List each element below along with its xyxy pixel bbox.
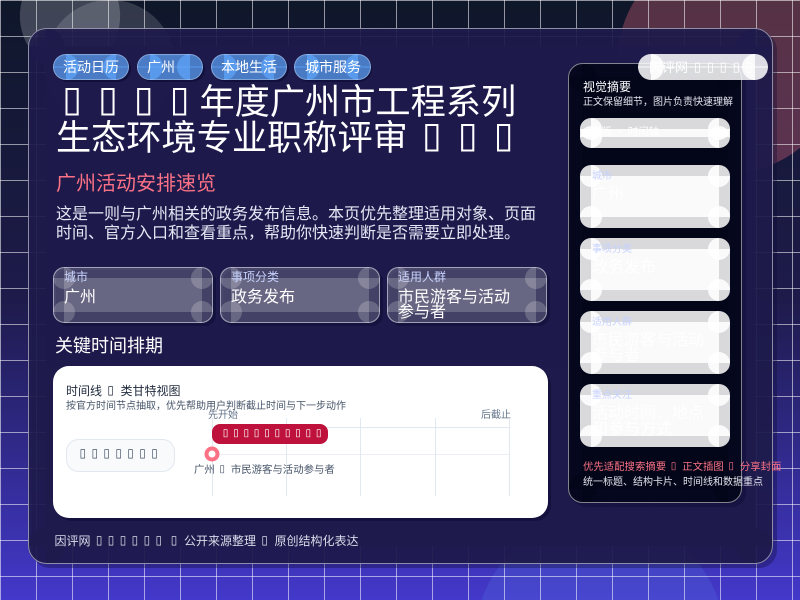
stat card: 城市: 广州	[64, 283, 96, 307]
subtitle: 广州活动安排速览	[56, 167, 216, 196]
timeline heading: 时间线	[66, 382, 102, 399]
section heading: 关键时间排期	[55, 332, 163, 358]
pill: 城市服务	[294, 54, 372, 82]
milestone dot	[206, 448, 218, 460]
footer: ▯	[261, 533, 273, 547]
card: 适用人群	[580, 311, 730, 374]
card: format: 横版 · 时间轴	[591, 123, 659, 138]
gantt bar	[212, 424, 328, 444]
footer: ▯	[171, 533, 183, 547]
stat card: 适用人群	[387, 267, 550, 326]
pill: 活动日历: 活动日历	[63, 57, 119, 77]
summary heading: 视觉摘要	[583, 78, 631, 95]
card: 重点关注: 和参与方式	[592, 415, 672, 439]
title: ▯▯▯	[422, 115, 529, 156]
card: 重点关注	[580, 384, 730, 447]
card: 事项分类	[580, 238, 730, 301]
adaptation note: ▯	[728, 460, 739, 472]
card: 城市	[580, 165, 730, 228]
brand pill: 因评网	[649, 57, 688, 76]
stat card: 城市	[53, 267, 216, 326]
stat card: 事项分类: 事项分类	[231, 268, 279, 285]
adaptation note: ▯	[671, 460, 681, 472]
adaptation note: 正文插图	[679, 458, 727, 473]
timeline heading: ▯	[107, 383, 119, 397]
pill: 活动日历	[53, 54, 131, 82]
footer: 原创结构化表达	[271, 532, 359, 549]
panel: visual summary	[568, 63, 781, 507]
title: 生态环境专业职称评审	[56, 110, 408, 161]
adaptation note: 分享封面	[737, 458, 781, 473]
stat card: 事项分类: 政务发布	[231, 283, 295, 307]
title	[56, 74, 529, 161]
stat card: 适用人群: 参与者	[398, 298, 446, 322]
intro text	[56, 200, 536, 243]
stat card: 适用人群: 适用人群	[398, 268, 446, 285]
tag pills	[53, 54, 372, 82]
footer: 公开来源整理	[181, 532, 259, 549]
pill: 城市服务: 城市服务	[305, 57, 361, 77]
axis label: start: 先开始	[208, 406, 238, 421]
title: 年度广州市工程系列	[199, 74, 516, 125]
card: 城市: 广州	[592, 180, 624, 204]
footer: ▯▯▯▯▯▯	[96, 533, 168, 547]
pill: 本地生活	[211, 54, 289, 82]
chip: row label	[66, 440, 174, 472]
timeline description: 按官方时间节点抽取，优先帮助用户判断截止时间与下一步动作	[66, 397, 346, 412]
milestone label: ▯	[219, 463, 230, 475]
footer: 因评网	[54, 532, 91, 549]
brand pill: ▯▯▯▯▯	[694, 60, 758, 75]
summary note: 统一标题、结构卡片、时间线和数据重点	[583, 473, 763, 488]
intro text: 时间、官方入口和查看重点，帮助你快速判断是否需要立即处理。	[56, 219, 520, 243]
stat card: 适用人群: 市民游客与活动	[398, 283, 510, 307]
chip: row label: ▯▯▯▯▯▯▯	[80, 446, 163, 460]
title: ▯▯▯▯	[62, 79, 205, 120]
stat card: 事项分类	[220, 267, 383, 326]
milestone label: 市民游客与活动参与者	[228, 461, 335, 476]
summary description: 正文保留细节，图片负责快速理解	[583, 93, 733, 108]
intro text: 这是一则与广州相关的政务发布信息。本页优先整理适用对象、页面	[56, 200, 536, 224]
card: 事项分类: 事项分类	[592, 240, 632, 255]
pill: 本地生活: 本地生活	[221, 57, 277, 77]
gantt bar: ▯▯▯▯▯▯▯▯▯▯	[223, 427, 326, 439]
stat card: 城市: 城市	[64, 268, 88, 285]
pill: 广州: 广州	[147, 57, 175, 77]
card: 适用人群: 市民游客与活动	[592, 326, 704, 350]
milestone label: 广州	[194, 461, 215, 476]
brand pill	[638, 54, 768, 80]
pill: 广州	[137, 54, 205, 82]
card: format	[580, 118, 730, 148]
card: 适用人群: 参与者	[592, 341, 640, 365]
axis label: end: 后截止	[481, 406, 511, 421]
card: 适用人群: 适用人群	[592, 313, 632, 328]
card: 事项分类: 政务发布	[592, 253, 656, 277]
card: 城市: 城市	[592, 167, 612, 182]
adaptation note: 优先适配搜索摘要	[583, 458, 666, 473]
panel: timeline	[53, 366, 551, 521]
card: 重点关注: 重点关注	[592, 386, 632, 401]
timeline heading: 类甘特视图	[117, 382, 181, 399]
card: 重点关注: 活动时间、地点	[592, 399, 704, 423]
